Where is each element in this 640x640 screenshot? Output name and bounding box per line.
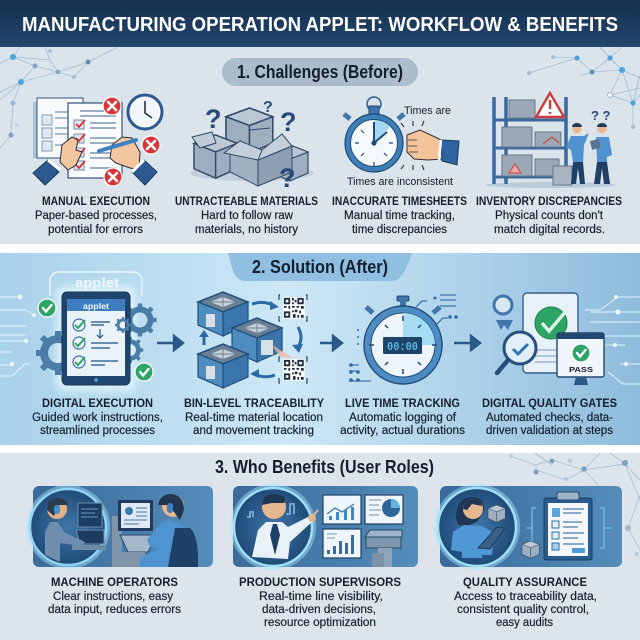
text: quality assurance: easy audits — [496, 617, 553, 629]
network decoration — [509, 453, 640, 556]
text: manual execution: MANUAL EXECUTION — [42, 196, 150, 208]
icon: untraceable boxes: ? — [280, 107, 296, 137]
text: untraceable materials: UNTRACTEABLE MATERIALS — [175, 196, 318, 208]
text: inventory discrepancies: match digital records. — [494, 224, 605, 236]
text: production supervisors: Real-time line visibility, — [259, 591, 383, 603]
supervisor portrait circle — [232, 486, 318, 568]
text: quality assurance: Access to traceability data, — [454, 591, 597, 603]
icon: untraceable boxes: ? — [279, 163, 296, 193]
text: digital quality gates: Automated checks, data- — [486, 412, 613, 424]
text: production supervisors: PRODUCTION SUPERVISORS — [239, 577, 401, 589]
text: inventory discrepancies: INVENTORY DISCREPANCIES — [476, 196, 622, 208]
panel: machine operators image — [28, 486, 213, 567]
text: digital execution — [32, 398, 163, 437]
panel: challenges — [0, 47, 640, 244]
arrow: time tracking to quality gates — [454, 336, 480, 350]
section heading: solution: 2. Solution (After) — [252, 257, 388, 277]
text: live time tracking — [340, 398, 465, 437]
text: digital quality gates: driven validation at steps — [486, 425, 613, 437]
text: digital execution: streamlined processes — [40, 425, 155, 437]
icon: stopwatch and fist — [344, 97, 459, 172]
text: quality assurance: QUALITY ASSURANCE — [463, 577, 587, 589]
text: live time tracking: Automatic logging of — [349, 412, 457, 424]
circuit decoration left — [0, 294, 36, 376]
text: bin-level traceability: and movement tracking — [193, 425, 314, 437]
text: machine operators: MACHINE OPERATORS — [51, 577, 178, 589]
text: bin-level traceability — [184, 398, 324, 437]
icon: digital execution tablet: applet — [75, 275, 120, 290]
panel: quality assurance image — [436, 486, 622, 568]
text: quality assurance: consistent quality control, — [457, 604, 589, 616]
text: digital execution: Guided work instructions, — [32, 412, 163, 424]
text: inaccurate timesheets — [332, 196, 467, 236]
panel: solution — [0, 253, 640, 445]
section heading: challenges — [222, 58, 418, 86]
annotation: times are inconsistent: Times are inconsistent — [347, 176, 453, 188]
icon: digital execution tablet: applet — [83, 302, 109, 311]
text: machine operators: data input, reduces errors — [48, 604, 181, 616]
text: inaccurate timesheets: INACCURATE TIMESHEETS — [332, 196, 467, 208]
text: inaccurate timesheets: time discrepancies — [352, 224, 447, 236]
icon: inventory shelves and workers: ? ? — [591, 108, 611, 123]
text: machine operators — [48, 577, 181, 616]
annotation: times are: Times are — [404, 105, 451, 117]
text: untraceable materials: materials, no history — [195, 224, 298, 236]
icon: digital quality gates — [494, 293, 604, 385]
text: production supervisors: resource optimization — [264, 617, 376, 629]
icon: inventory shelves and workers — [485, 93, 615, 188]
text: bin-level traceability: BIN-LEVEL TRACEABILITY — [184, 398, 324, 410]
text: digital execution: DIGITAL EXECUTION — [42, 398, 153, 410]
section heading: challenges: 1. Challenges (Before) — [237, 62, 403, 82]
icon: bins and QR codes — [198, 292, 307, 388]
panel: production supervisors image — [232, 486, 418, 568]
network decoration right — [527, 47, 640, 129]
text: inventory discrepancies — [476, 196, 622, 236]
operator workstation — [112, 494, 198, 567]
text: digital quality gates: DIGITAL QUALITY GATES — [482, 398, 617, 410]
text: live time tracking: LIVE TIME TRACKING — [345, 398, 460, 410]
text: untraceable materials: Hard to follow raw — [201, 210, 294, 222]
icon: digital execution tablet — [36, 272, 156, 391]
icon: untraceable boxes — [190, 99, 314, 193]
text: live time tracking: activity, actual durations — [340, 425, 465, 437]
arrow: traceability to time tracking — [320, 336, 342, 350]
icon: live stopwatch: 00:00 — [387, 340, 418, 354]
text: bin-level traceability: Real-time material location — [185, 412, 323, 424]
icon: digital quality gates: PASS — [569, 365, 593, 374]
section heading: who benefits: 3. Who Benefits (User Roles) — [215, 457, 434, 477]
dashboard screens — [323, 495, 403, 567]
text: inventory discrepancies: Physical counts don't — [495, 210, 604, 222]
text: inaccurate timesheets: Manual time tracking, — [344, 210, 455, 222]
network decoration left — [0, 47, 118, 148]
operator portrait circle — [28, 487, 108, 567]
circuit decoration right — [585, 295, 640, 384]
icon: untraceable boxes: ? — [205, 104, 222, 134]
text: digital quality gates — [482, 398, 617, 437]
text: untraceable materials — [175, 196, 318, 236]
text: production supervisors: data-driven decisions, — [262, 604, 376, 616]
icon: live stopwatch — [349, 295, 458, 384]
text: machine operators: Clear instructions, easy — [53, 591, 173, 603]
text: quality assurance — [454, 577, 597, 629]
text: manual execution — [35, 196, 157, 236]
text: production supervisors — [239, 577, 401, 629]
header bar — [0, 0, 640, 47]
clipboard checklist — [522, 492, 612, 560]
icon: untraceable boxes: ? — [263, 99, 273, 116]
panel: who benefits — [0, 453, 640, 640]
text: manual execution: potential for errors — [48, 224, 143, 236]
QA portrait circle — [436, 486, 518, 568]
icon: manual execution — [33, 95, 162, 186]
arrow: execution to traceability — [157, 336, 183, 350]
text: manual execution: Paper-based processes, — [35, 210, 157, 222]
section heading: solution — [228, 253, 412, 281]
